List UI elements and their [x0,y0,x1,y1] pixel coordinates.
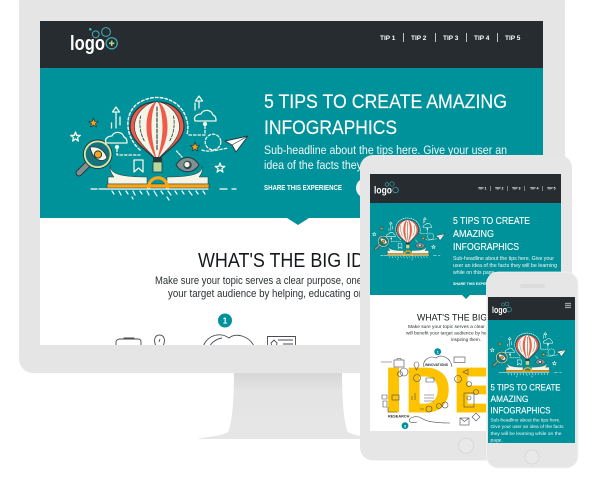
tablet sub-headline: Sub-headline about the tips here. Give your [453,256,554,262]
phone title [490,382,560,416]
yellow IDEA artwork: IDEA [385,356,542,426]
tablet header bar [370,174,561,203]
share button [356,180,360,196]
phone screen [488,297,575,444]
tablet innovations label: INNOVATIONS [425,363,449,367]
desktop navigation: TIP 1 [380,35,396,42]
tablet share label: SHARE THIS EXPERIENCE [453,282,500,286]
tablet body [360,155,572,460]
phone speaker [520,284,545,288]
tablet navigation: TIP 4 [530,186,539,190]
tablet title: INFOGRAPHICS [453,242,519,253]
desktop navigation: TIP 3 [443,35,459,42]
desktop monitor [19,0,565,373]
phone sub-headline: they will be learning while on the [490,431,562,437]
tablet sub-headline: while on this page. [453,270,496,276]
phone home button [525,450,539,464]
desktop section text: your target audience by helping, educating or [168,288,362,300]
desktop title: 5 TIPS TO CREATE AMAZING [264,91,507,113]
tablet step badge one: 1 [437,349,440,354]
tablet title [452,217,530,250]
tablet sub-headline [453,256,557,276]
tablet step badge one [434,348,441,355]
step number badge: 1 [223,316,228,326]
desktop title: INFOGRAPHICS [264,117,397,139]
tablet navigation: TIP 2 [495,186,504,190]
desktop title [264,94,506,134]
tablet section heading: WHAT'S THE BIG IDEA? [417,312,515,324]
tablet screen [370,174,561,431]
desktop logo: logo [70,33,105,55]
desktop section text [155,275,362,300]
desktop sub-headline: Sub-headline about the tips here. Give your user an [264,143,507,157]
share label: SHARE THIS EXPERIENCE [264,185,342,192]
phone title: INFOGRAPHICS [490,406,550,416]
stars [71,118,225,172]
desktop navigation: TIP 4 [474,35,490,42]
ground line and ticks [91,189,236,200]
tablet home button [458,438,474,453]
desktop sub-headline [264,143,507,172]
desktop header bar [40,21,543,68]
doodle icons cut off by screen [116,334,296,345]
magnifier with eye [79,140,112,173]
phone sub-headline: Give your user an idea of the facts [490,424,564,430]
phone sub-headline [490,418,564,444]
tablet navigation: TIP 3 [512,186,521,190]
book [107,165,209,188]
phone [486,272,578,468]
hero illustration [71,96,248,200]
tablet navigation: TIP 5 [547,186,556,190]
eye icon [176,158,199,172]
phone title: AMAZING [490,394,528,405]
phone header bar [488,297,575,320]
tablet logo: logo [374,184,392,196]
tablet [360,155,572,460]
tablet hero band [370,203,561,299]
phone body [486,272,578,468]
tablet section text: inspiring them. [451,337,481,343]
desktop navigation: TIP 2 [411,35,427,42]
tablet doodle icons [381,356,480,425]
phone sub-headline: Sub-headline about the tips here. [490,418,560,424]
clouds and arrows [106,96,228,172]
tablet title: 5 TIPS TO CREATE [453,216,530,227]
tablet step badge three: 3 [404,423,407,428]
tablet section text [406,324,486,342]
phone title: 5 TIPS TO CREATE [490,382,560,394]
desktop hero band [40,68,543,225]
phone hero illustration [490,332,566,377]
tablet sub-headline: user an idea of the facts they will be learning [453,263,557,269]
tablet hero illustration [372,217,445,260]
tablet title: AMAZING [453,229,494,240]
desktop section heading: WHAT'S THE BIG IDEA? [198,250,398,272]
desktop sub-headline: idea of the facts they [264,158,363,172]
tablet research label: RESEARCH [388,414,410,418]
phone menu icon [565,304,571,308]
desktop navigation [380,33,521,42]
tablet section text: will benefit your target audience by helping, educating or [406,330,526,336]
desktop navigation: TIP 5 [505,35,521,42]
tablet step badge three [402,422,408,429]
hot air balloon [128,97,188,172]
tablet navigation: TIP 1 [478,186,487,190]
tablet section text: Make sure your topic serves a clear purpose, one that [408,324,525,330]
step number badge [218,314,232,328]
tablet navigation [478,186,556,191]
paper plane [225,136,248,152]
monitor frame [19,0,565,373]
desktop screen [40,21,543,350]
desktop section text: Make sure your topic serves a clear purpose, one [155,275,362,287]
phone logo: logo [492,305,507,316]
monitor stand [197,372,379,439]
phone sub-headline: page. [490,438,503,444]
